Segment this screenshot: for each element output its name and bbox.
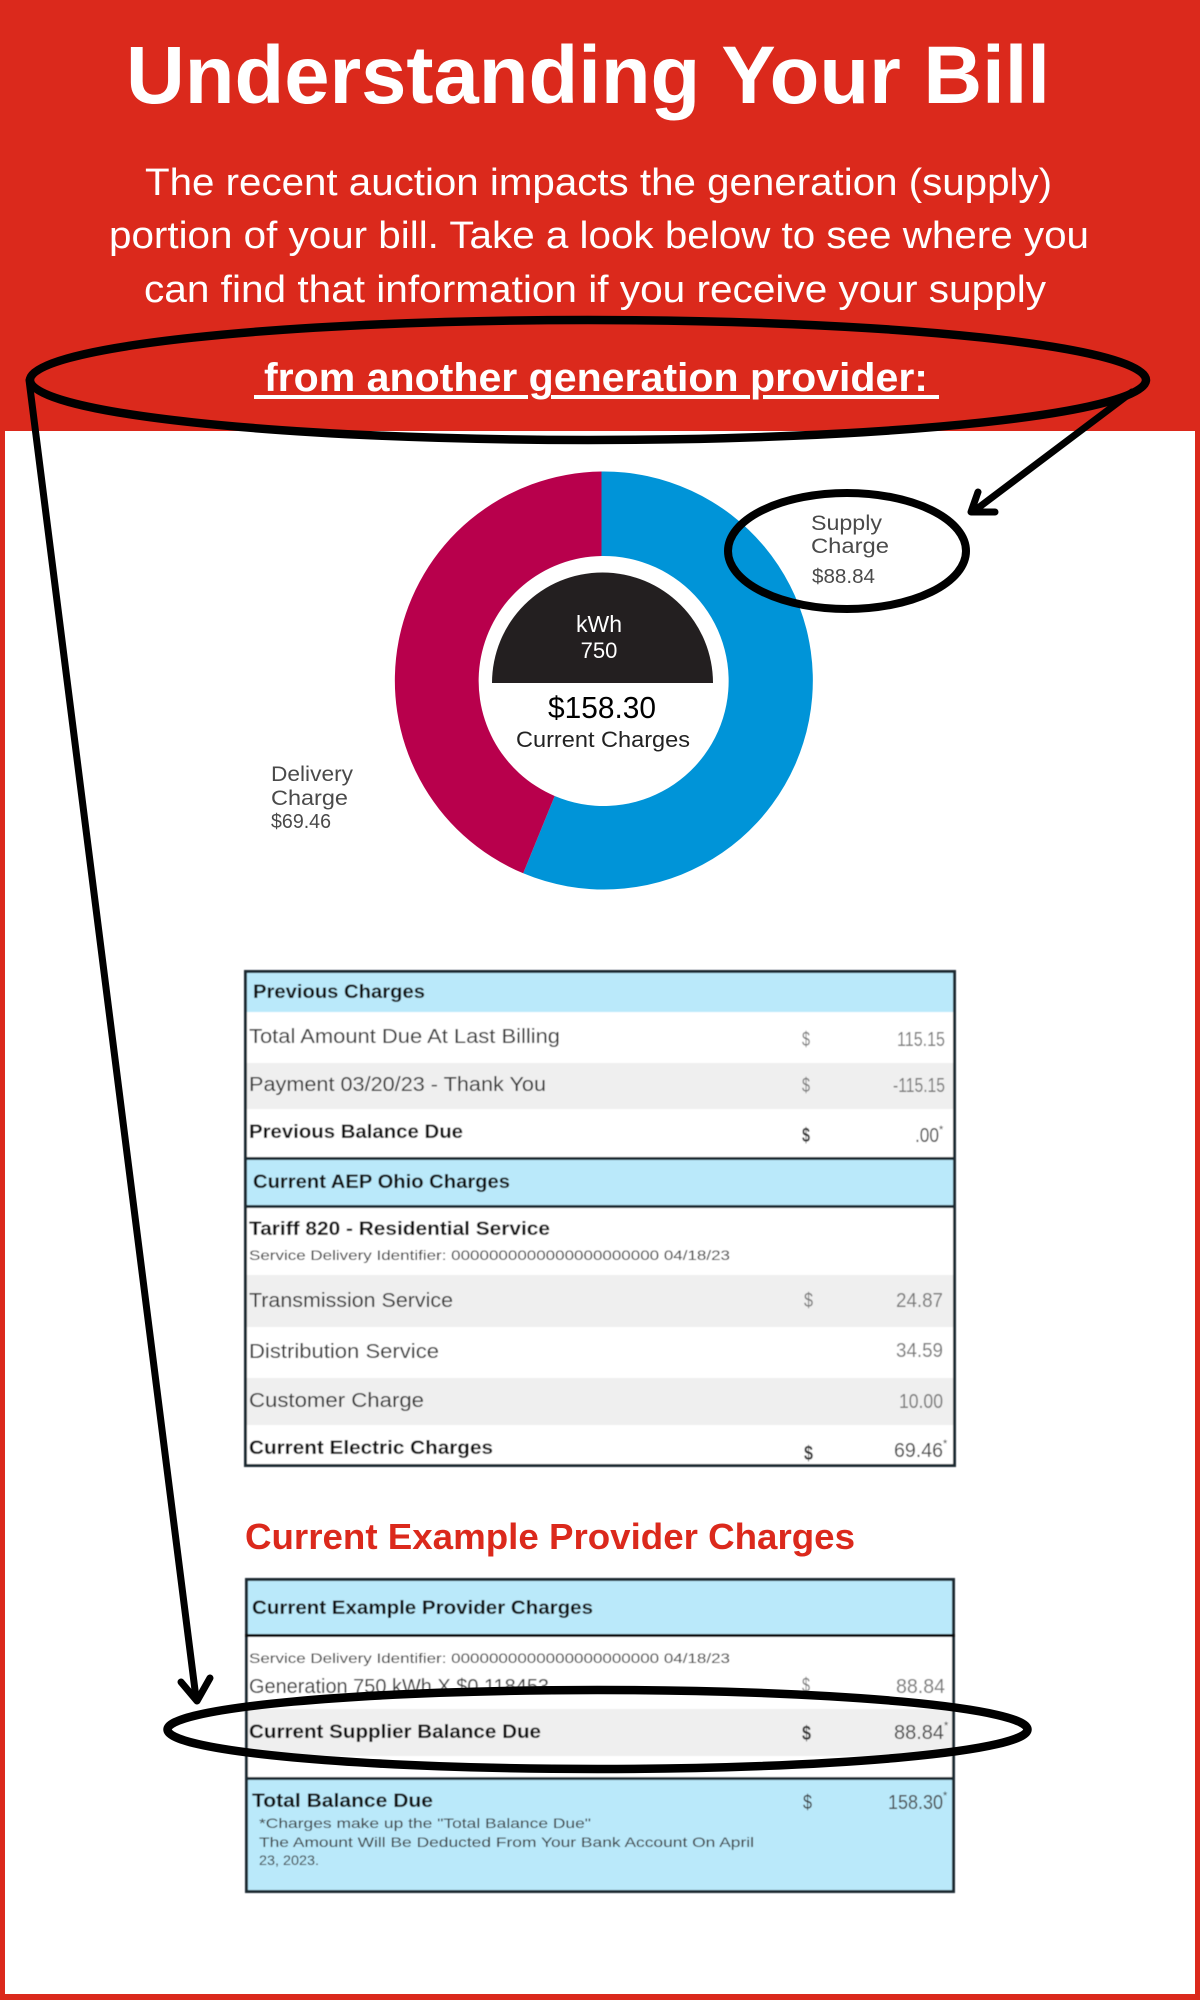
provider rows xyxy=(249,1650,949,1745)
label: delivery charge: Charge xyxy=(271,787,348,810)
total charges: $158.30 xyxy=(548,690,656,725)
current AEP Ohio charges section: 24.87 xyxy=(896,1290,943,1312)
total balance due: $ xyxy=(803,1792,812,1814)
callout ellipse: supplier balance due xyxy=(168,1690,1028,1769)
previous charges section: $ xyxy=(802,1125,810,1147)
label: delivery charge xyxy=(271,763,354,833)
previous charges section: Previous Balance Due xyxy=(249,1122,463,1143)
provider rows: 88.84 xyxy=(896,1676,945,1698)
current AEP Ohio charges section: Service Delivery Identifier: 0000000000000000000000 04/18/23 xyxy=(249,1247,730,1263)
previous charges section: .00 xyxy=(915,1125,939,1147)
label: supply charge xyxy=(811,512,889,588)
provider rows: Generation 750 kWh X $0.118453 xyxy=(249,1676,549,1698)
provider rows: * xyxy=(944,1720,949,1732)
previous charges section: Payment 03/20/23 - Thank You xyxy=(249,1074,546,1096)
current AEP Ohio charges section: * xyxy=(943,1438,948,1450)
previous charges section: $ xyxy=(802,1075,810,1097)
intro text xyxy=(109,162,1089,311)
donut chart: supply vs delivery xyxy=(395,471,813,889)
current AEP Ohio charges section: Current AEP Ohio Charges xyxy=(253,1172,510,1193)
table frame and fills xyxy=(245,1578,955,1893)
previous charges section: 115.15 xyxy=(897,1029,945,1051)
provider rows: $ xyxy=(802,1723,811,1745)
previous charges section xyxy=(249,982,945,1147)
provider rows: $ xyxy=(802,1675,810,1697)
label: delivery charge: $69.46 xyxy=(271,811,331,833)
callout ellipse: supply charge xyxy=(728,493,966,609)
current AEP Ohio charges section xyxy=(249,1172,948,1465)
provider rows: Current Supplier Balance Due xyxy=(249,1722,541,1743)
title: Understanding Your Bill xyxy=(126,30,1050,121)
previous charges section: Total Amount Due At Last Billing xyxy=(249,1026,560,1048)
total balance due: * xyxy=(943,1790,948,1802)
current AEP Ohio charges section: Customer Charge xyxy=(249,1390,424,1412)
current AEP Ohio charges section: Transmission Service xyxy=(249,1290,453,1312)
total balance due: Total Balance Due xyxy=(252,1791,433,1812)
current AEP Ohio charges section: $ xyxy=(804,1443,813,1465)
current AEP Ohio charges section: 69.46 xyxy=(894,1440,943,1462)
emphasized line: from another generation provider: from another generation provider: xyxy=(264,356,928,400)
total charges: Current Charges xyxy=(516,727,690,752)
kWh gauge: 750 xyxy=(581,638,617,663)
total charges xyxy=(516,690,690,752)
intro text: The recent auction impacts the generation (supply) xyxy=(145,162,1052,204)
current AEP Ohio charges section: Tariff 820 - Residential Service xyxy=(249,1219,550,1240)
intro text: portion of your bill. Take a look below to see where you xyxy=(109,215,1089,257)
callout ellipse: generation provider line xyxy=(30,320,1146,440)
header: title and intro xyxy=(109,30,1089,400)
label: supply charge: Charge xyxy=(811,535,889,558)
current AEP Ohio charges section: Current Electric Charges xyxy=(249,1438,493,1459)
total balance due: 23, 2023. xyxy=(259,1852,319,1868)
current AEP Ohio charges section: 10.00 xyxy=(899,1391,943,1413)
provider header: Current Example Provider Charges xyxy=(252,1598,593,1619)
section heading: current example provider charges: Current Example Provider Charges xyxy=(245,1516,855,1557)
kWh gauge xyxy=(492,573,713,683)
previous charges section: * xyxy=(939,1124,944,1136)
total balance due xyxy=(252,1790,948,1868)
arrow: to supply charge xyxy=(971,392,1132,512)
total balance due: The Amount Will Be Deducted From Your Bank Account On April xyxy=(259,1834,754,1850)
label: supply charge: Supply xyxy=(811,512,883,535)
provider rows: Service Delivery Identifier: 0000000000000000000000 04/18/23 xyxy=(249,1650,730,1666)
delivery segment xyxy=(395,472,602,873)
provider rows: 88.84 xyxy=(894,1722,944,1744)
kWh gauge: kWh xyxy=(576,611,622,637)
current AEP Ohio charges section: $ xyxy=(804,1290,813,1312)
row backgrounds xyxy=(244,970,956,1467)
total balance due: 158.30 xyxy=(888,1792,943,1814)
total balance due: *Charges make up the "Total Balance Due" xyxy=(259,1815,591,1831)
previous charges section: -115.15 xyxy=(893,1075,945,1097)
current AEP Ohio charges section: Distribution Service xyxy=(249,1341,439,1363)
label: delivery charge: Delivery xyxy=(271,763,354,786)
previous charges section: Previous Charges xyxy=(253,982,425,1003)
label: supply charge: $88.84 xyxy=(812,566,875,588)
previous charges section: $ xyxy=(802,1029,810,1051)
current AEP Ohio charges section: 34.59 xyxy=(896,1340,943,1362)
arrow: to supplier balance due xyxy=(29,380,210,1701)
bill table: previous and AEP Ohio charges xyxy=(244,970,956,1467)
intro text: can find that information if you receive your supply xyxy=(144,269,1046,311)
bill table: example provider charges xyxy=(245,1578,955,1893)
supply segment xyxy=(523,471,813,889)
